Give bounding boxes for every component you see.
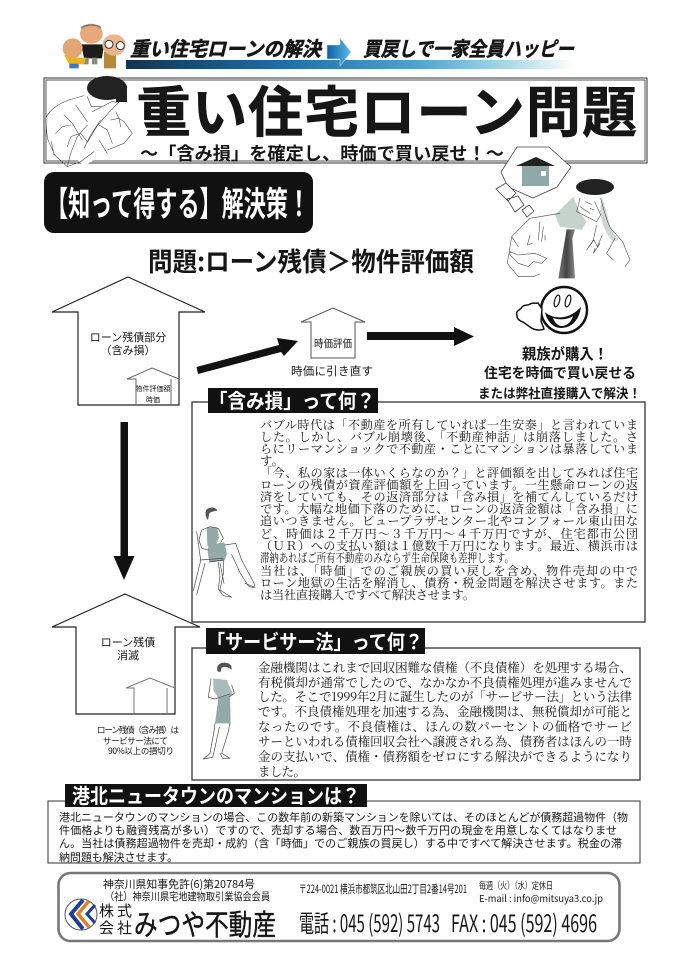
body text: 滞納あればご所有不動産のみならず生命保険も差押します。 [260, 549, 514, 566]
business hours and email: E-mail : info@mitsuya3.co.jp [479, 891, 603, 905]
thought bubble [496, 147, 571, 217]
body text: 港北ニュータウンのマンションの場合、この数年前の新築マンションを除いては、そのほとんどが債務超過物件（物 [59, 809, 628, 825]
body text: 有税償却が通常でしたので、なかなか不良債権処理が進みませんで [258, 673, 632, 691]
body text: は当社直接購入ですべて解決させます。 [260, 586, 475, 603]
body text: です。大幅な地価下落のために、ローンの返済金額は「含み損」に [260, 500, 638, 517]
body text: ました。 [258, 762, 306, 780]
house diagram: loan balance [52, 277, 205, 405]
banner left text: 重い住宅ローンの解決 [130, 33, 323, 62]
body text: ローン地獄の生活を解消し、債務・税金問題を解決させます。また [260, 574, 638, 591]
label: debt eliminated: 消滅 [117, 647, 139, 663]
footer: company information [58, 873, 620, 944]
business hours and email [479, 878, 603, 905]
body text: です。不良債権処理を加速する為、金融機関は、無税償却が可能と [258, 702, 632, 720]
body text: した。そこで1999年2月に誕生したのが「サービサー法」という法律 [258, 687, 632, 705]
panel: what is negative equity [192, 385, 645, 622]
body text: ん。当社は債務超過物件を売却・成約（含「時価」でのご親族の買戻し）する中ですべて解決させます。税金の滞 [59, 835, 622, 851]
label: negative equity: （含み損） [100, 342, 156, 358]
body text: 金融機関はこれまで回収困難な債権（不良債権）を処理する場合、 [258, 658, 632, 676]
panel heading: 「含み損」って何？ [209, 385, 375, 414]
body text: 追いつきません。ビュープラザセンター北やコンフォール東山田な [260, 512, 638, 529]
icon: standing woman [203, 663, 234, 759]
body text: 済をしていても、その返済部分は「含み損」を補てんしているだけ [260, 488, 638, 505]
phone and fax: 電話 : 045 (592) 5743 [299, 904, 440, 939]
company name [99, 900, 276, 944]
arrow: to market value [196, 338, 298, 374]
body text: 当社は、「時価」でのご親族の買い戻しを含め、物件売却の中で [260, 562, 638, 579]
callout: relatives purchase: 親族が購入！ [522, 343, 608, 364]
small house: appraised value: 物件評価額 [136, 384, 170, 394]
body text: らにリーマンショックで不動産・ことにマンションは暴落していま [260, 440, 638, 457]
house diagram: market value [301, 308, 365, 358]
body text [258, 658, 632, 780]
panel heading: solution: 【知って得する】解決策！ [46, 177, 310, 226]
body text: 「今、私の家は一体いくらなのか？」と評価額を出してみれば住宅 [260, 464, 638, 481]
phone and fax: FAX : 045 (592) 4696 [451, 904, 597, 939]
license text [103, 876, 270, 904]
arrow: to relative purchase [367, 327, 474, 346]
note: servicer law write-off: サービサー法にて [103, 735, 168, 747]
panel: what is servicer law [192, 626, 640, 780]
company name: みつや不動産 [134, 902, 276, 944]
body text [59, 809, 628, 865]
label: restate to market value: 時価に引き直す [291, 363, 373, 379]
note: servicer law write-off: ローン残債（含み損）は [97, 724, 179, 736]
body text: ど、時価は２千万円～３千万円～４千万円ですが、住宅都市公団 [260, 525, 638, 542]
body text: サーといわれる債権回収会社へ譲渡される為、債務者はほんの一時 [258, 732, 632, 750]
panel heading: 港北ニュータウンのマンションは？ [72, 780, 360, 809]
body text: （ＵＲ）への支払い額は１億数千万円になります。最近、横浜市は [260, 537, 638, 554]
company name: 株式 [99, 900, 132, 921]
banner underline [126, 60, 574, 69]
body text: なったのです。不良債権は、ほんの数パーセントの価格でサービ [258, 717, 632, 735]
house diagram: debt eliminated [52, 594, 200, 714]
note: servicer law write-off: 90%以上の損切り [108, 745, 174, 757]
title: 重い住宅ローン問題 [136, 68, 637, 148]
body text: した。しかし、バブル崩壊後、「不動産神話」は崩落しました。さ [260, 428, 638, 445]
body text: ローンの残債が資産評価額を上回っています。一生懸命ローンの返 [260, 476, 638, 493]
icon: cartoon family [63, 24, 126, 68]
label: negative equity [90, 329, 166, 358]
note: servicer law write-off [97, 724, 179, 757]
callout: relatives purchase: または弊社直接購入で解決！ [478, 383, 641, 402]
panel heading: 「サービサー法」って何？ [207, 626, 423, 655]
address: 〒224-0021 横浜市都筑区北山田2丁目2番14号201 [299, 881, 467, 897]
body text: 納問題も解決させます。 [59, 849, 178, 865]
license text: （社）神奈川県宅地建物取引業協会会員 [105, 889, 270, 904]
license text: 神奈川県知事免許(6)第20784号 [103, 876, 255, 892]
label: debt eliminated [101, 634, 155, 663]
label: negative equity: ローン残債部分 [90, 329, 166, 345]
body text: 金の支払いで、債権・債務額をゼロにする解決ができるようになり [258, 747, 632, 765]
body text [260, 416, 638, 603]
small house: appraised value: 時価 [146, 395, 160, 405]
small house: appraised value [127, 368, 179, 405]
icon: man with head in hands [46, 76, 148, 167]
company name: 会社 [99, 917, 132, 938]
label: debt eliminated: ローン残債 [101, 634, 155, 650]
business hours and email: 毎週（火）（水）定休日 [479, 878, 553, 892]
icon: worried man with thought bubble [496, 147, 630, 278]
banner right text: 買戻しで一家全員ハッピー [363, 33, 575, 62]
title panel [44, 68, 647, 167]
top banner [63, 24, 575, 69]
icon: banner arrow [327, 38, 351, 66]
icon: smiley with hand [517, 287, 587, 333]
panel heading: solution [44, 172, 313, 233]
panel: Kohoku New Town condominiums [48, 780, 640, 865]
small house remainder [126, 678, 175, 713]
subtitle: ～「含み損」を確定し、時価で買い戻せ！～ [140, 140, 504, 166]
icon: seated woman [193, 507, 255, 597]
callout: relatives purchase: 住宅を時価で買い戻せる [484, 363, 636, 383]
body text: バブル時代は「不動産を所有していれば一生安泰」と言われていま [260, 416, 638, 433]
callout: relatives purchase [478, 343, 641, 402]
body text: 件価格よりも融資残高が多い）ですので、売却する場合、数百万円～数千万円の現金を用意しなくてはなりませ [59, 822, 617, 838]
body text: す。 [260, 452, 284, 469]
arrow: down to cancellation [114, 422, 134, 580]
heading: problem: 問題:ローン残債＞物件評価額 [148, 242, 474, 279]
house diagram: market value: 時価評価 [314, 336, 352, 351]
icon: company logo [65, 899, 97, 930]
man figure [507, 179, 630, 278]
